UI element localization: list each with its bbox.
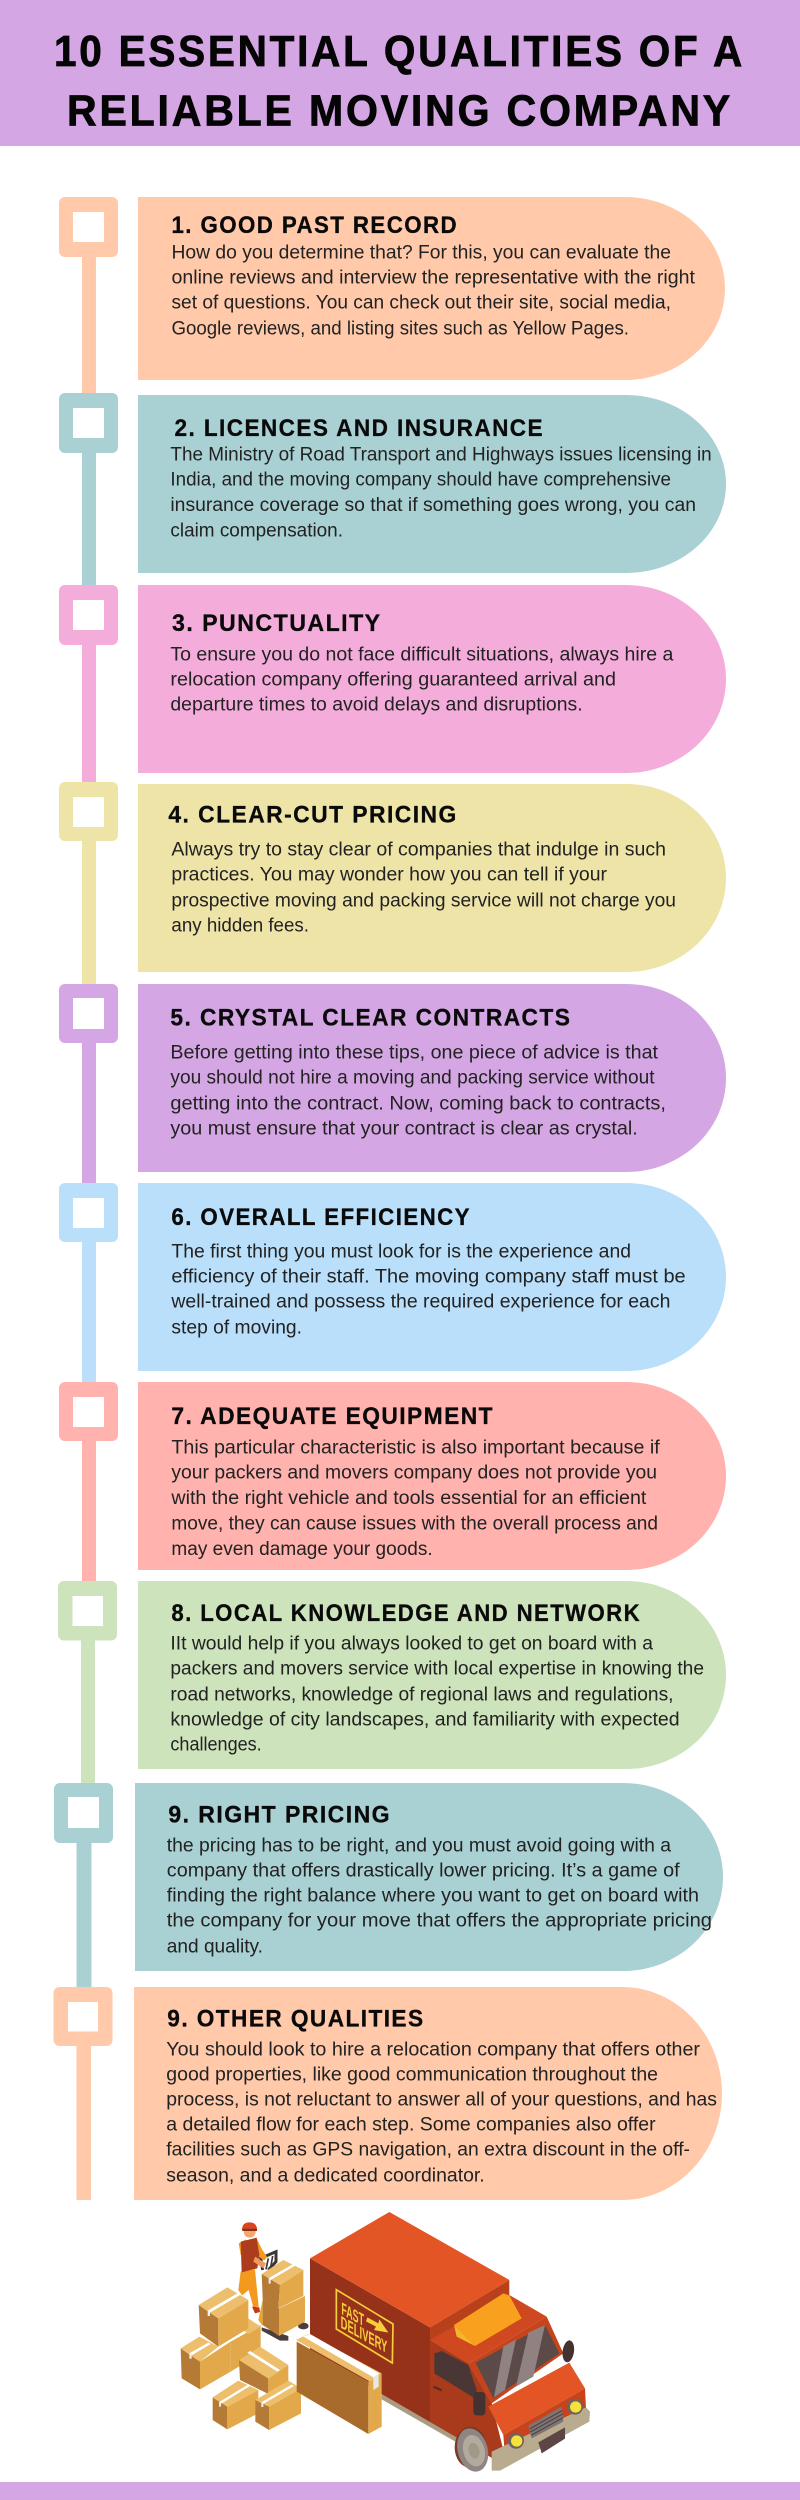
cab roof xyxy=(430,2295,547,2363)
body text 6: efficiency of their staff. The moving company staff must be xyxy=(171,1267,686,1288)
title: 10 ESSENTIAL QUALITIES OF A xyxy=(54,27,745,76)
panel: 10 other qualities xyxy=(54,1987,722,2200)
panel: 2 licences and insurance xyxy=(59,393,726,586)
body text 7 xyxy=(170,1437,660,1560)
body text 8: knowledge of city landscapes, and familiarity with expected xyxy=(170,1709,680,1730)
body text 3: relocation company offering guaranteed arrival and xyxy=(170,670,616,691)
body text 2: India, and the moving company should have comprehensive xyxy=(170,470,671,491)
heading 4: 4. CLEAR-CUT PRICING xyxy=(168,802,458,829)
body text 4: practices. You may wonder how you can tell if your xyxy=(171,864,608,886)
card shape 1 xyxy=(138,197,725,380)
body text 9: finding the right balance where you want to get on board with xyxy=(167,1886,699,1907)
body text 4: prospective moving and packing service will not charge you xyxy=(171,890,676,912)
body text 3: departure times to avoid delays and disruptions. xyxy=(170,695,583,716)
box bottom left xyxy=(213,2381,258,2429)
footer band xyxy=(0,2482,800,2500)
heading 6: 6. OVERALL EFFICIENCY xyxy=(171,1204,471,1231)
timeline marker 7 xyxy=(59,1382,118,1582)
heading 3: 3. PUNCTUALITY xyxy=(172,610,382,637)
body text 8: road networks, knowledge of regional laws and regulations, xyxy=(170,1685,674,1706)
card shape 2 xyxy=(138,395,726,573)
body text 4: Always try to stay clear of companies that indulge in such xyxy=(171,840,666,861)
body text 7: may even damage your goods. xyxy=(171,1539,433,1560)
body text 3 xyxy=(170,644,674,716)
heading 9: 9. RIGHT PRICING xyxy=(168,1802,391,1829)
timeline marker 6 xyxy=(59,1183,118,1383)
body text 7: This particular characteristic is also important because if xyxy=(171,1437,660,1458)
large flat box xyxy=(296,2334,382,2434)
title xyxy=(54,27,745,136)
body text 6: The first thing you must look for is the experience and xyxy=(171,1241,631,1262)
card shape 7 xyxy=(138,1382,726,1570)
timeline marker 5 xyxy=(59,984,118,1184)
title: RELIABLE MOVING COMPANY xyxy=(67,86,733,136)
roof front edge xyxy=(430,2280,509,2342)
truck side xyxy=(310,2258,504,2461)
stacked boxes on jack xyxy=(262,2260,305,2336)
body text 4: any hidden fees. xyxy=(171,915,309,936)
hood xyxy=(488,2363,585,2435)
truck sill xyxy=(382,2393,457,2442)
timeline marker 9 xyxy=(54,1783,113,1988)
truck front xyxy=(503,2388,586,2456)
body text 10: a detailed flow for each step. Some companies also offer xyxy=(166,2114,656,2135)
body text 8: packers and movers service with local expertise in knowing the xyxy=(170,1658,704,1680)
illustration: delivery truck xyxy=(310,2212,590,2475)
windshield xyxy=(476,2325,559,2398)
timeline marker 2 xyxy=(59,393,118,586)
body text 9 xyxy=(167,1835,712,1957)
body text 10: facilities such as GPS navigation, an extra discount in the off- xyxy=(166,2139,690,2160)
delivery sign: FAST xyxy=(341,2298,364,2330)
box lower left xyxy=(181,2337,231,2389)
card shape 10 xyxy=(134,1987,722,2200)
box bottom right xyxy=(255,2381,301,2430)
mirrors xyxy=(473,2340,575,2415)
body text 5: you must ensure that your contract is clear as crystal. xyxy=(170,1119,638,1140)
body text 1: Google reviews, and listing sites such as Yellow Pages. xyxy=(172,318,629,340)
panel: 6 overall efficiency xyxy=(59,1183,726,1383)
heading 7: 7. ADEQUATE EQUIPMENT xyxy=(171,1403,494,1430)
panel: 1 good past record xyxy=(59,197,725,395)
pallet jack xyxy=(258,2252,309,2341)
body text 10: season, and a dedicated coordinator. xyxy=(166,2165,485,2186)
side window xyxy=(434,2351,477,2398)
panel: 8 local knowledge and network xyxy=(58,1581,726,1784)
body text 10: good properties, like good communication throughout the xyxy=(166,2064,658,2085)
cab side xyxy=(430,2340,505,2461)
body text 7: your packers and movers company does not provide you xyxy=(171,1463,657,1484)
body text 4 xyxy=(171,840,676,936)
front wheel xyxy=(452,2425,493,2475)
body text 1: How do you determine that? For this, you can evaluate the xyxy=(172,243,671,264)
body text 1 xyxy=(172,243,696,340)
body text 9: company that offers drastically lower pricing. It’s a game of xyxy=(167,1860,680,1881)
box middle xyxy=(239,2347,288,2394)
body text 2: insurance coverage so that if something goes wrong, you can xyxy=(170,495,696,516)
body text 2: claim compensation. xyxy=(170,520,343,542)
card shape 5 xyxy=(138,984,726,1172)
body text 2: The Ministry of Road Transport and Highways issues licensing in xyxy=(170,444,712,465)
body text 6: step of moving. xyxy=(171,1318,302,1339)
card shape 9 xyxy=(135,1783,723,1971)
body text 1: online reviews and interview the representative with the right xyxy=(172,268,696,289)
body text 3: To ensure you do not face difficult situations, always hire a xyxy=(170,644,674,666)
body text 5: getting into the contract. Now, coming back to contracts, xyxy=(170,1093,666,1114)
body text 10: You should look to hire a relocation company that offers other xyxy=(166,2039,701,2060)
timeline marker 1 xyxy=(59,197,118,395)
illustration: boxes and worker xyxy=(181,2222,382,2434)
panel: 5 crystal clear contracts xyxy=(59,984,726,1184)
truck roof xyxy=(310,2212,509,2327)
header band xyxy=(0,0,800,146)
timeline marker 10 xyxy=(54,1987,112,2200)
body text 6: well-trained and possess the required experience for each xyxy=(170,1292,670,1312)
body text 2 xyxy=(170,444,712,542)
body text 7: move, they can cause issues with the overall process and xyxy=(171,1514,658,1534)
body text 8: challenges. xyxy=(170,1735,262,1756)
license plate xyxy=(538,2427,565,2453)
body text 9: the pricing has to be right, and you must avoid going with a xyxy=(167,1835,671,1856)
windshield frame xyxy=(468,2317,563,2403)
timeline marker 3 xyxy=(59,585,118,783)
body text 8 xyxy=(170,1633,704,1756)
heading 5: 5. CRYSTAL CLEAR CONTRACTS xyxy=(170,1005,571,1032)
body text 5: Before getting into these tips, one piece of advice is that xyxy=(170,1042,659,1064)
door handle xyxy=(433,2386,442,2391)
panel: 9 right pricing xyxy=(54,1783,723,1988)
panel: 3 punctuality xyxy=(59,585,726,783)
delivery sign xyxy=(336,2290,393,2363)
box stacked left xyxy=(199,2287,248,2347)
heading 2: 2. LICENCES AND INSURANCE xyxy=(174,415,544,442)
wind deflector xyxy=(454,2293,522,2346)
worker xyxy=(238,2222,267,2313)
box back right xyxy=(231,2318,261,2372)
body text 9: and quality. xyxy=(167,1936,263,1957)
body text 9: the company for your move that offers the appropriate pricing xyxy=(167,1910,712,1931)
body text 7: with the right vehicle and tools essential for an efficient xyxy=(170,1488,647,1509)
body text 6 xyxy=(170,1241,686,1339)
body text 5 xyxy=(170,1042,666,1140)
grille xyxy=(528,2407,563,2438)
bumper xyxy=(492,2407,590,2471)
body text 5: you should not hire a moving and packing service without xyxy=(170,1067,655,1088)
panel: 7 adequate equipment xyxy=(59,1382,726,1582)
body text 1: set of questions. You can check out their site, social media, xyxy=(172,292,671,314)
heading 8: 8. LOCAL KNOWLEDGE AND NETWORK xyxy=(171,1600,641,1627)
body text 10 xyxy=(166,2039,717,2186)
card shape 8 xyxy=(138,1581,726,1769)
heading 1: 1. GOOD PAST RECORD xyxy=(172,212,458,239)
card shape 4 xyxy=(138,784,726,972)
timeline marker 8 xyxy=(58,1581,117,1784)
timeline marker 4 xyxy=(59,782,118,985)
card shape 3 xyxy=(138,585,726,773)
heading 10: 9. OTHER QUALITIES xyxy=(167,2006,425,2033)
card shape 6 xyxy=(138,1183,726,1371)
headlights xyxy=(508,2399,583,2449)
panel: 4 clear-cut pricing xyxy=(59,782,726,985)
body text 10: process, is not reluctant to answer all of your questions, and has xyxy=(166,2089,717,2110)
delivery sign: DELIVERY xyxy=(341,2312,388,2357)
body text 8: IIt would help if you always looked to get on board with a xyxy=(170,1633,653,1654)
